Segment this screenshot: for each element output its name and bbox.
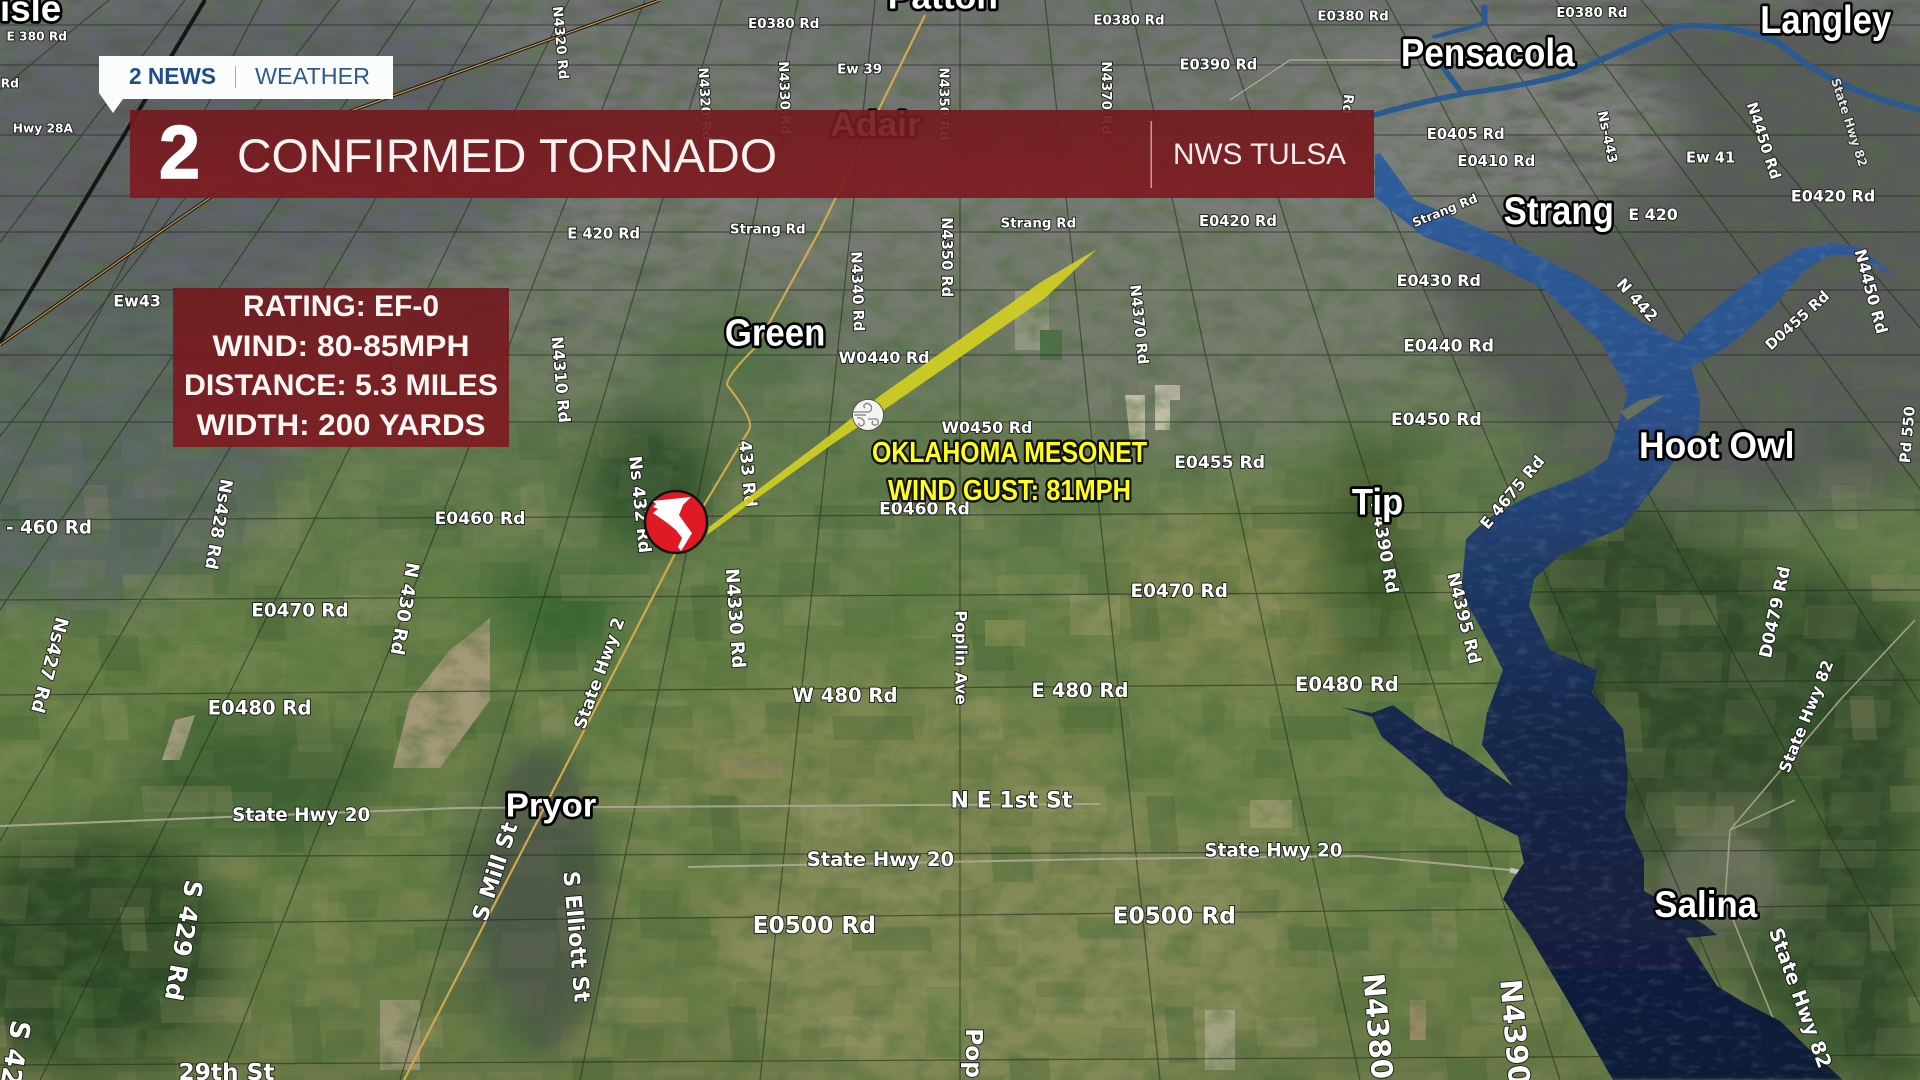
road labels: State Hwy 20: [232, 805, 370, 826]
road labels: N4320 Rd: [695, 67, 713, 141]
mesonet callout: [872, 437, 1147, 507]
city labels: Green: [725, 312, 825, 354]
road labels: Rd: [1, 76, 19, 90]
road labels: N4350 Rd: [938, 217, 955, 297]
road labels: N4390 Rd: [1366, 500, 1402, 595]
road labels: E0380 Rd: [1317, 10, 1389, 25]
road labels: N4370 Rd: [1126, 284, 1151, 365]
road labels: N4340 Rd: [847, 251, 867, 332]
road labels: N4310 Rd: [548, 336, 574, 424]
city labels: Tip: [1352, 481, 1403, 522]
road labels: W 480 Rd: [792, 684, 897, 707]
road labels: E0380 Rd: [1556, 6, 1628, 21]
road labels: E 480 Rd: [1032, 679, 1128, 702]
road labels: Ew43: [113, 292, 161, 311]
road labels: N E 1st St: [950, 788, 1073, 813]
road labels: E 380 Rd: [6, 30, 67, 44]
stats panel: RATING: EF-0: [243, 290, 439, 323]
road labels: Poplin Ave: [952, 610, 971, 705]
road labels: - 460 Rd: [6, 517, 92, 538]
road labels: E0470 Rd: [1131, 581, 1228, 602]
road labels: State Hwy 82: [1828, 76, 1870, 168]
road labels: Ew 41: [1686, 149, 1735, 166]
road labels: N4320 Rd: [549, 6, 570, 80]
farm fields: [162, 290, 1426, 1070]
road labels: N4380: [1356, 972, 1399, 1080]
road labels: N 430 Rd: [386, 561, 423, 657]
road labels: E0460 Rd: [435, 509, 525, 529]
road labels: E0390 Rd: [1179, 56, 1257, 73]
logo tag: WEATHER: [255, 63, 370, 89]
road labels: E0450 Rd: [1391, 410, 1482, 430]
road labels: 433 Rd: [734, 440, 760, 508]
road labels: E0455 Rd: [1174, 453, 1265, 473]
stats panel: [173, 288, 509, 447]
road labels: W0440 Rd: [839, 348, 930, 367]
road labels: N4370 Rd: [1098, 61, 1113, 135]
road labels: Strang Rd: [730, 223, 806, 238]
stats panel: DISTANCE: 5.3 MILES: [184, 369, 498, 402]
road labels: S 429 Rd: [159, 878, 209, 1003]
road labels: N4450 Rd: [1851, 247, 1891, 336]
road labels: D0479 Rd: [1756, 565, 1795, 660]
road labels: E 4675 Rd: [1476, 452, 1548, 533]
road labels: Hwy 28A: [13, 122, 74, 136]
road labels: N4350 Rd: [935, 67, 950, 141]
city labels: Hoot Owl: [1639, 425, 1795, 466]
road labels: E0405 Rd: [1427, 126, 1505, 143]
road labels: Ns428 Rd: [200, 477, 236, 571]
city labels: Salina: [1654, 884, 1758, 925]
road labels: E0460 Rd: [879, 499, 970, 519]
headline: CONFIRMED TORNADO: [237, 129, 777, 182]
city labels: Adair: [830, 106, 921, 144]
road labels: N4330 Rd: [721, 568, 749, 669]
road labels: N4395 Rd: [1442, 571, 1484, 666]
icon: mesonet wind gust: [852, 400, 884, 430]
road labels: W0450 Rd: [941, 418, 1032, 437]
logo tag: [99, 56, 393, 113]
road labels: Pd 550: [1897, 406, 1919, 464]
road labels: D0455 Rd: [1762, 288, 1833, 354]
stats panel: WIND: 80-85MPH: [212, 330, 470, 363]
road labels: E0380 Rd: [1093, 13, 1165, 28]
city labels: Strang: [1504, 190, 1614, 233]
road labels: Pop: [960, 1028, 987, 1078]
road labels: State Hwy 20: [807, 848, 954, 871]
causeway in lake: [1620, 395, 1665, 420]
road labels: Ns427 Rd: [26, 615, 72, 715]
logo tag: 2 NEWS: [129, 63, 216, 89]
road labels: E0440 Rd: [1403, 337, 1494, 357]
mesonet callout: OKLAHOMA MESONET: [872, 437, 1147, 469]
stats panel: WIDTH: 200 YARDS: [196, 409, 485, 442]
road labels: S Elliott St: [557, 870, 594, 1004]
road labels: E0500 Rd: [753, 912, 876, 939]
lake Hudson: [1340, 140, 1920, 1080]
road labels: E 420 Rd: [567, 225, 640, 242]
town of Salina built-up: [1660, 830, 1780, 930]
road labels: Rd: [1339, 93, 1355, 115]
road labels: E0470 Rd: [251, 601, 349, 622]
road labels: N4330 Rd: [775, 61, 792, 135]
farm field mosaic: [0, 408, 1920, 1080]
road labels: State Hwy 82: [1775, 657, 1837, 775]
road labels: E0380 Rd: [748, 17, 819, 32]
city labels: Pensacola: [1401, 32, 1576, 75]
road labels: Ew 39: [837, 62, 882, 77]
tornado track: [707, 249, 1097, 535]
mesonet callout: WIND GUST: 81MPH: [888, 475, 1131, 507]
road labels: S Mill St: [468, 819, 524, 924]
road labels: E0410 Rd: [1457, 153, 1535, 170]
city labels: Pryor: [506, 788, 596, 825]
city labels: Langley: [1760, 0, 1891, 42]
road labels: E0420 Rd: [1199, 213, 1277, 230]
road labels: Ns 432 Rd: [624, 455, 654, 554]
town of Pryor built-up: [485, 750, 605, 1050]
road labels: Strang Rd: [1001, 217, 1076, 232]
road labels: N4450 Rd: [1743, 100, 1784, 182]
source: NWS TULSA: [1173, 138, 1346, 171]
icon: tornado touchdown: [645, 491, 707, 553]
big numeral: 2: [159, 110, 200, 194]
road labels: Ns-443: [1594, 110, 1619, 165]
title banner: [130, 110, 1374, 198]
road labels: E0500 Rd: [1113, 902, 1236, 929]
road labels: E0480 Rd: [208, 696, 311, 719]
road labels: E0480 Rd: [1295, 673, 1399, 696]
road labels: State Hwy 82: [1764, 925, 1836, 1071]
road labels: N 442: [1613, 274, 1662, 326]
road labels: State Hwy 2: [571, 615, 629, 732]
road labels: Strang Rd: [1410, 191, 1479, 230]
road labels: E 420: [1628, 205, 1678, 224]
road labels: E0430 Rd: [1397, 271, 1481, 290]
river upper channel: [1375, 7, 1920, 115]
road labels: E0420 Rd: [1791, 186, 1875, 205]
road labels: State Hwy 20: [1204, 841, 1343, 862]
